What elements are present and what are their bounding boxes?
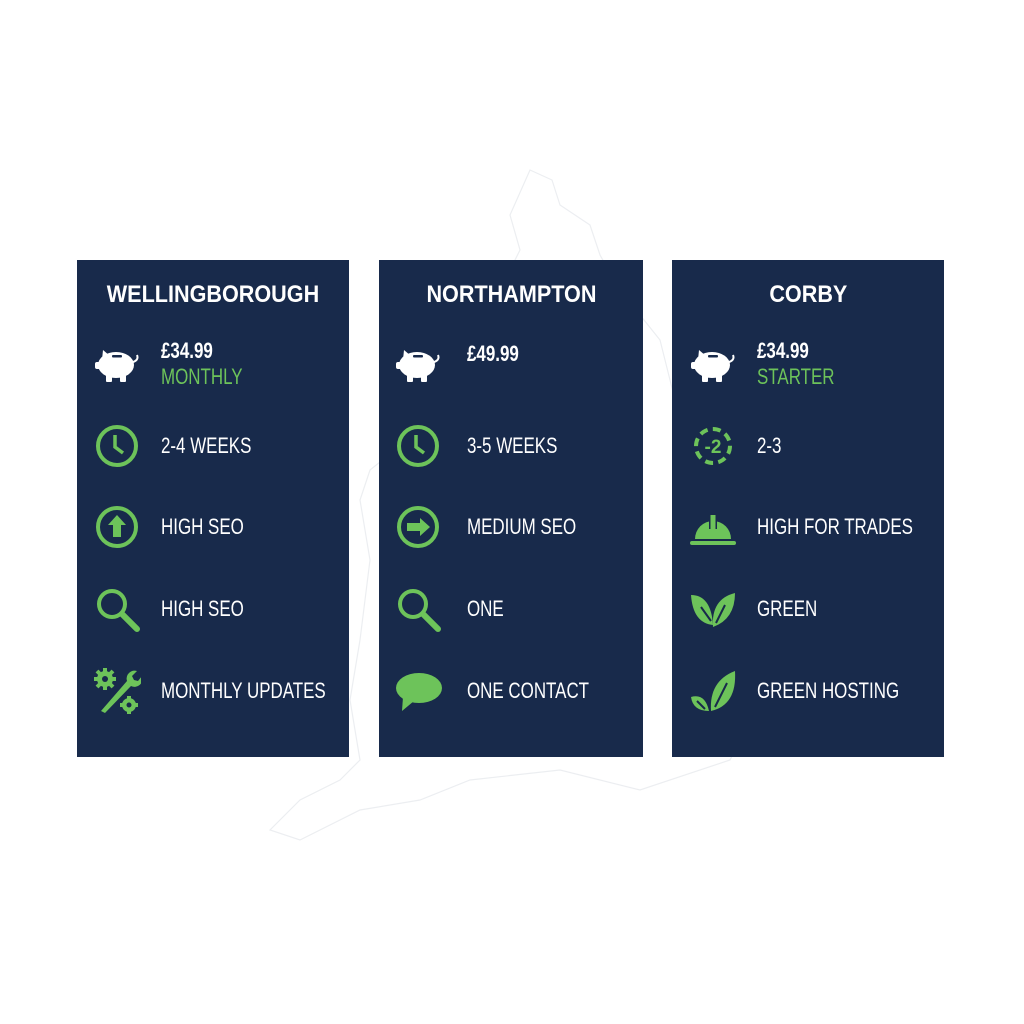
row: hosting <box>691 671 899 711</box>
panel: Corby <box>672 260 944 757</box>
icon: leaves <box>691 671 736 711</box>
icon: two leaves <box>691 593 735 627</box>
row: updates <box>94 668 326 714</box>
row: price <box>691 338 835 389</box>
row: price <box>396 341 519 382</box>
text: ONE CONTACT <box>467 678 589 703</box>
panel: Northampton <box>379 260 643 757</box>
text: price: £34.99 <box>161 338 213 363</box>
row: search <box>398 589 504 632</box>
row: count <box>694 427 781 465</box>
text: price: MONTHLY <box>161 364 243 389</box>
row: contact <box>396 673 589 711</box>
text: price: £49.99 <box>467 341 519 366</box>
panel: Wellingborough <box>77 260 349 757</box>
row: seo <box>397 506 576 548</box>
icon: piggy bank <box>691 350 734 382</box>
row: price <box>95 338 243 389</box>
row: search <box>97 589 244 632</box>
text: 2-4 WEEKS <box>161 433 251 458</box>
icon: magnifier <box>97 589 140 632</box>
icon: right arrow circle <box>397 506 439 548</box>
icon: dashed circle 2: -2 <box>705 437 721 458</box>
row: green <box>691 593 817 627</box>
text: price: STARTER <box>757 364 835 389</box>
heading: NORTHAMPTON <box>426 281 596 308</box>
heading: WELLINGBOROUGH <box>107 281 319 308</box>
icon: piggy bank <box>95 350 138 382</box>
text: HIGH SEO <box>161 596 244 621</box>
text: HIGH SEO <box>161 514 244 539</box>
icon: dashed circle 2 <box>694 427 732 465</box>
icon: up arrow circle <box>96 506 138 548</box>
icon: speech bubble <box>396 673 442 711</box>
row: timeline <box>96 425 251 467</box>
heading: CORBY <box>769 281 847 308</box>
row: seo <box>96 506 244 548</box>
icon: hard hat <box>690 515 736 545</box>
text: ONE <box>467 596 504 621</box>
icon: clock <box>96 425 138 467</box>
text: 3-5 WEEKS <box>467 433 557 458</box>
text: MEDIUM SEO <box>467 514 576 539</box>
text: GREEN <box>757 596 817 621</box>
icon: clock <box>397 425 439 467</box>
icon: piggy bank <box>396 350 440 382</box>
text: price: £34.99 <box>757 338 809 363</box>
row: timeline <box>397 425 557 467</box>
text: HIGH FOR TRADES <box>757 514 913 539</box>
text: price <box>161 338 243 389</box>
text: 2-3 <box>757 433 781 458</box>
icon: gears and wrench <box>94 668 141 714</box>
text: MONTHLY UPDATES <box>161 678 326 703</box>
text: GREEN HOSTING <box>757 678 899 703</box>
text: price <box>757 338 835 389</box>
icon: magnifier <box>398 589 441 632</box>
row: trades <box>690 514 913 545</box>
